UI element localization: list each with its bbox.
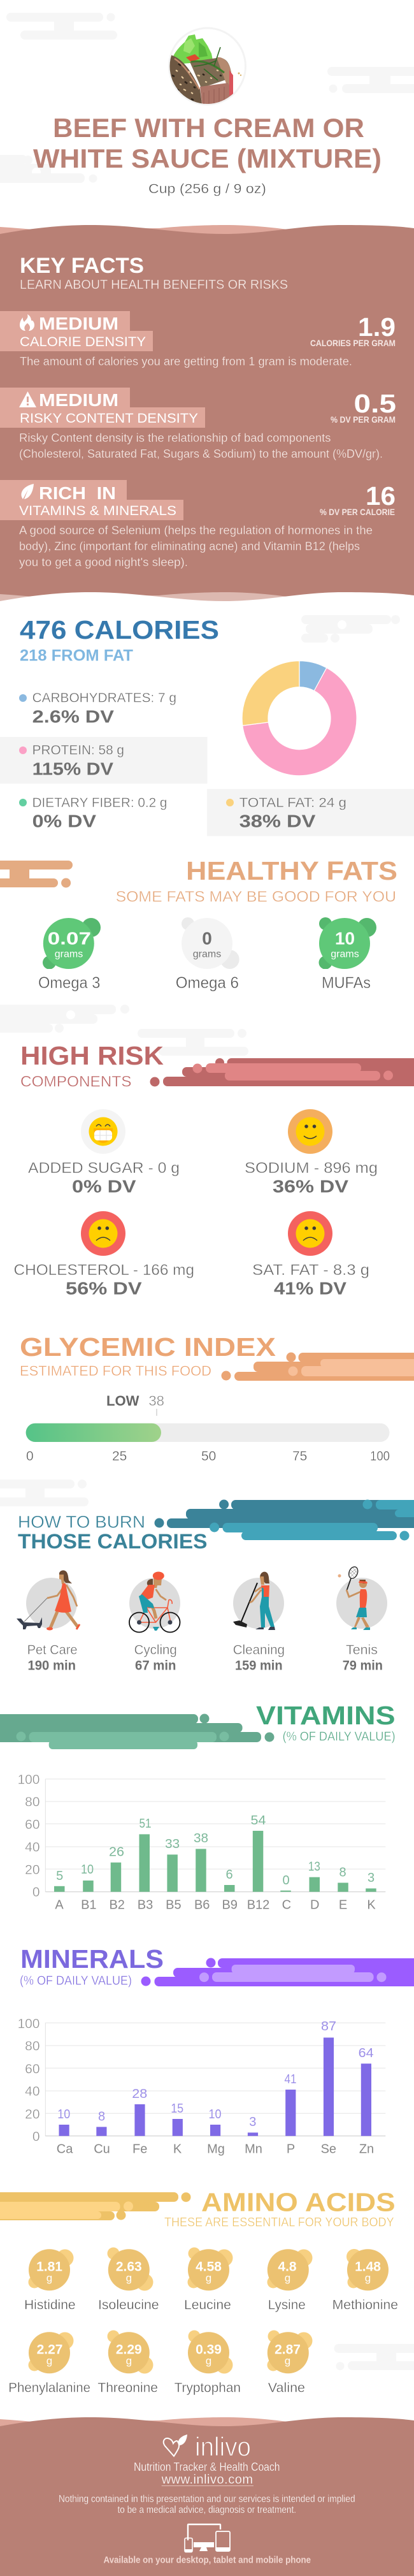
marker label: LOW <box>106 1393 139 1409</box>
scale labels: 25 <box>112 1449 127 1464</box>
activity: pet care <box>17 1570 80 1673</box>
nutrient: carbohydrates <box>19 691 176 726</box>
serving size: Cup (256 g / 9 oz) <box>148 182 266 196</box>
scale labels <box>26 1449 390 1464</box>
heading: minerals: MINERALS <box>20 1944 164 1974</box>
rating: MEDIUM <box>39 314 118 333</box>
y axis labels <box>17 1772 39 1900</box>
panel: footer <box>0 2417 414 2576</box>
x axis labels: B2 <box>109 1898 125 1912</box>
bar values: 6 <box>225 1868 233 1882</box>
glycemic scale <box>26 1393 390 1464</box>
icon: leaf <box>21 484 34 499</box>
x axis labels: K <box>173 2142 182 2156</box>
disclaimer: to be a medical advice, diagnosis or treatment. <box>117 2505 296 2515</box>
bar values: 10 <box>209 2107 222 2121</box>
amino acid: tryptophan: g <box>206 2355 211 2367</box>
bar values: 5 <box>56 1869 63 1883</box>
subheading: calories from fat: 218 FROM FAT <box>20 646 133 664</box>
bar values: 28 <box>132 2087 147 2101</box>
nutrient: protein: 115% DV <box>32 759 113 778</box>
risk: sodium <box>245 1109 378 1197</box>
x axis labels: Mg <box>207 2142 225 2156</box>
x axis labels: Fe <box>132 2142 147 2156</box>
amino acid: phenylalanine: Phenylalanine <box>8 2381 90 2396</box>
heading: amino acids: AMINO ACIDS <box>201 2187 396 2216</box>
activity: cleaning: 159 min <box>235 1658 283 1673</box>
subheading: key facts: LEARN ABOUT HEALTH BENEFITS OR RISKS <box>20 277 288 292</box>
bars <box>54 1831 376 1892</box>
title: BEEF WITH CREAM OR <box>53 113 364 143</box>
subheading: components: COMPONENTS <box>20 1073 131 1090</box>
amino acid: leucine: Leucine <box>184 2298 231 2313</box>
bar values: 64 <box>359 2046 374 2060</box>
x axis labels: B5 <box>166 1898 182 1912</box>
activity: cleaning: Cleaning <box>233 1643 285 1657</box>
bar values: 10 <box>57 2107 70 2121</box>
y axis labels: 60 <box>25 1817 39 1832</box>
title: WHITE SAUCE (MIXTURE) <box>33 143 382 173</box>
y axis labels: 80 <box>25 1795 39 1809</box>
activity: tennis: 79 min <box>343 1658 383 1673</box>
bar values: 8 <box>98 2110 105 2124</box>
heading: calories: 476 CALORIES <box>20 615 219 644</box>
risk: saturated fat <box>252 1211 369 1299</box>
decorative band: burn <box>154 1499 414 1540</box>
scale labels: 75 <box>292 1449 307 1464</box>
risk: added sugar: ADDED SUGAR - 0 g <box>28 1160 180 1177</box>
amino acid: histidine: 1.81 <box>36 2260 62 2274</box>
icon: grinning face <box>81 1109 125 1154</box>
description: you to get a good night's sleep). <box>19 556 188 569</box>
icon: warning triangle <box>19 391 36 407</box>
amino acid: threonine: 2.29 <box>116 2342 142 2357</box>
amino acid: lysine: 4.8 <box>278 2260 297 2274</box>
icon: woman walking dog <box>17 1570 80 1631</box>
decorative band: high risk <box>150 1058 414 1086</box>
y axis labels: 60 <box>25 2062 39 2076</box>
risk: cholesterol <box>14 1211 194 1299</box>
nutrient: total fat: TOTAL FAT: 24 g <box>239 796 346 810</box>
icon: sad face <box>81 1211 125 1256</box>
bars <box>59 2037 371 2136</box>
amino acid: phenylalanine <box>8 2332 90 2396</box>
badge: MUFAs: MUFAs <box>322 974 371 992</box>
bar values: 3 <box>368 1871 375 1885</box>
risk: added sugar <box>28 1109 180 1197</box>
amino acid: leucine <box>184 2248 233 2313</box>
x axis labels: Zn <box>359 2142 374 2156</box>
fact: rich in vitamins and minerals <box>0 480 396 569</box>
disclaimer: Nothing contained in this presentation and our services is intended or implied <box>59 2494 355 2505</box>
bar values: 10 <box>81 1863 94 1877</box>
unit: % DV PER GRAM <box>331 414 396 425</box>
x axis labels <box>57 2142 374 2156</box>
decorative band: glycemic index <box>222 1353 414 1381</box>
value: 0.5 <box>354 389 396 418</box>
unit: % DV PER CALORIE <box>320 507 395 517</box>
amino acid: histidine: Histidine <box>24 2298 76 2313</box>
badge: omega 3: Omega 3 <box>38 974 101 992</box>
amino acid: isoleucine: Isoleucine <box>98 2298 159 2313</box>
metric name: CALORIE DENSITY <box>20 335 146 349</box>
heading: high risk: HIGH RISK <box>20 1041 164 1070</box>
decorative band: vitamins <box>0 1714 274 1749</box>
bar values: 0 <box>282 1874 290 1888</box>
badge: omega 6: Omega 6 <box>176 974 239 992</box>
amino acid: valine: Valine <box>268 2381 305 2396</box>
heading: how to burn those calories <box>18 1513 208 1553</box>
y axis labels: 20 <box>25 1863 39 1877</box>
heading: how to burn those calories: HOW TO BURN <box>18 1513 145 1532</box>
decorative band: healthy fats <box>0 861 73 887</box>
icon: sad face <box>288 1211 332 1256</box>
bar values: 87 <box>321 2019 336 2034</box>
donut chart: macronutrients <box>242 661 357 776</box>
bar values: 26 <box>109 1845 124 1859</box>
amino acid: lysine: Lysine <box>268 2298 306 2313</box>
x axis labels: B3 <box>138 1898 153 1912</box>
y axis labels: 40 <box>25 2085 39 2099</box>
amino acid: lysine: g <box>285 2272 290 2284</box>
amino acid: methionine <box>332 2249 398 2313</box>
amino acid: threonine: g <box>126 2355 132 2367</box>
availability note: Available on your desktop, tablet and mobile phone <box>103 2555 311 2566</box>
y axis labels: 40 <box>25 1840 39 1855</box>
activity: cleaning <box>233 1572 285 1673</box>
scale labels: 50 <box>201 1449 216 1464</box>
value: 16 <box>366 481 396 511</box>
amino acid: tryptophan: 0.39 <box>196 2342 222 2357</box>
activity: cycling: Cycling <box>134 1643 177 1657</box>
title <box>33 113 382 173</box>
badge: omega 6: grams <box>193 949 221 960</box>
amino acid: tryptophan: Tryptophan <box>175 2381 241 2396</box>
description: The amount of calories you are getting from 1 gram is moderate. <box>20 355 352 368</box>
description <box>19 432 383 460</box>
activity: cycling <box>129 1572 180 1673</box>
nutrient: protein: PROTEIN: 58 g <box>32 743 124 758</box>
amino acid: lysine <box>268 2249 312 2313</box>
amino acid: phenylalanine: 2.27 <box>37 2342 62 2357</box>
activity: tennis: Tenis <box>346 1643 378 1657</box>
nutrient: dietary fiber: DIETARY FIBER: 0.2 g <box>32 796 167 810</box>
fact: calorie density <box>0 311 396 368</box>
bar values: 8 <box>339 1865 346 1879</box>
bar values <box>56 1814 375 1888</box>
badge: MUFAs: grams <box>331 949 359 960</box>
bar values: 41 <box>284 2072 297 2086</box>
risk: cholesterol: 56% DV <box>66 1279 142 1299</box>
amino acid: phenylalanine: g <box>46 2355 52 2367</box>
subheading: glycemic index: ESTIMATED FOR THIS FOOD <box>20 1363 211 1379</box>
description: A good source of Selenium (helps the regulation of hormones in the <box>19 524 373 537</box>
logo: inlivo <box>164 2432 251 2462</box>
subheading: amino acids: THESE ARE ESSENTIAL FOR YOUR BODY <box>164 2216 394 2230</box>
nutrient: protein <box>0 737 208 783</box>
x axis labels: D <box>310 1898 319 1912</box>
bar values: 38 <box>194 1831 208 1845</box>
y axis labels: 20 <box>25 2107 39 2121</box>
risk: cholesterol: CHOLESTEROL - 166 mg <box>14 1262 194 1279</box>
badge: omega 3: 0.07 <box>48 929 91 949</box>
bar values: 13 <box>308 1860 320 1874</box>
nutrient: dietary fiber: 0% DV <box>32 811 96 831</box>
x axis labels: P <box>287 2142 295 2156</box>
risk: saturated fat: SAT. FAT - 8.3 g <box>252 1262 369 1279</box>
nutrient: total fat <box>207 789 414 836</box>
bar values: 15 <box>171 2102 183 2116</box>
subheading: minerals: (% OF DAILY VALUE) <box>20 1974 132 1988</box>
heading: vitamins: VITAMINS <box>256 1701 396 1730</box>
amino acid: valine <box>268 2331 312 2396</box>
x axis labels: Mn <box>245 2142 262 2156</box>
description: body), Zinc (important for eliminating acne) and Vitamin B12 (helps <box>19 540 360 553</box>
scale labels: 0 <box>26 1449 34 1464</box>
glycemic scale: 38 <box>148 1393 164 1409</box>
icon: woman on bicycle <box>129 1572 180 1632</box>
heading: glycemic index: GLYCEMIC INDEX <box>20 1332 276 1362</box>
activity: tennis <box>336 1566 387 1673</box>
bar values: 33 <box>165 1837 180 1851</box>
risk: sodium: 36% DV <box>273 1177 348 1197</box>
fact: risky content density <box>0 388 396 460</box>
subheading: vitamins: (% OF DAILY VALUE) <box>283 1730 396 1744</box>
x axis labels: B6 <box>194 1898 210 1912</box>
value: 1.9 <box>358 312 396 342</box>
y axis labels: 100 <box>17 2017 39 2032</box>
background clouds: high risk <box>0 1005 248 1056</box>
icon: person sweeping <box>233 1572 284 1630</box>
background cloud: amino acids <box>334 2344 414 2370</box>
amino acid: histidine <box>24 2249 76 2313</box>
bar values: 51 <box>139 1817 152 1831</box>
x axis labels <box>55 1898 376 1912</box>
heading: healthy fats: HEALTHY FATS <box>186 856 397 885</box>
icon: tennis player <box>336 1566 387 1630</box>
amino acid: valine: 2.87 <box>275 2342 301 2357</box>
bar values: 3 <box>249 2115 256 2129</box>
y axis labels: 80 <box>25 2039 39 2054</box>
unit: CALORIES PER GRAM <box>310 338 396 348</box>
subheading: healthy fats: SOME FATS MAY BE GOOD FOR YOU <box>116 888 396 905</box>
x axis labels: E <box>339 1898 347 1912</box>
x axis labels: K <box>367 1898 376 1912</box>
y axis labels: 0 <box>32 2129 39 2144</box>
heading: how to burn those calories: THOSE CALORIES <box>18 1530 208 1553</box>
rating: RICH IN <box>39 483 116 503</box>
scale track <box>26 1423 390 1442</box>
y axis labels <box>17 2017 39 2144</box>
activity: cycling: 67 min <box>135 1658 176 1673</box>
heading: key facts: KEY FACTS <box>20 254 144 278</box>
risk: sodium: SODIUM - 896 mg <box>245 1160 378 1177</box>
icon: flame <box>20 314 34 331</box>
logo: inlivo: inlivo <box>195 2432 251 2462</box>
y axis labels: 0 <box>32 1885 39 1900</box>
metric name: VITAMINS & MINERALS <box>19 504 176 518</box>
x axis labels: B12 <box>247 1898 269 1912</box>
bar chart: minerals <box>17 2017 385 2156</box>
amino acid: methionine: g <box>365 2272 371 2284</box>
description: Risky Content density is the relationship of bad components <box>19 432 331 444</box>
description: (Cholesterol, Saturated Fat, Sugars & Sodium) to the amount (%DV/gr). <box>19 448 383 460</box>
background cloud: calories <box>301 615 400 643</box>
bar values: 54 <box>251 1814 266 1828</box>
icon: desktop tablet phone <box>185 2524 230 2552</box>
x axis labels: C <box>282 1898 291 1912</box>
badge: MUFAs: 10 <box>335 929 355 949</box>
amino acid: isoleucine: 2.63 <box>116 2260 142 2274</box>
x axis labels: B1 <box>81 1898 97 1912</box>
nutrient: dietary fiber <box>19 796 167 831</box>
amino acid: methionine: Methionine <box>332 2298 398 2313</box>
tagline: Nutrition Tracker & Health Coach <box>134 2460 280 2473</box>
amino acid: isoleucine <box>98 2248 159 2313</box>
amino acid: leucine: 4.58 <box>196 2260 222 2274</box>
amino acid: methionine: 1.48 <box>355 2260 381 2274</box>
amino acid: threonine <box>97 2331 158 2396</box>
scale labels: 100 <box>370 1449 390 1464</box>
badge: omega 3: grams <box>55 949 83 960</box>
amino acid: tryptophan <box>175 2331 241 2396</box>
metric name: RISKY CONTENT DENSITY <box>20 411 198 426</box>
disclaimer <box>59 2494 355 2515</box>
bar values <box>57 2019 374 2129</box>
x axis labels: Cu <box>94 2142 110 2156</box>
risk: added sugar: 0% DV <box>72 1177 136 1197</box>
badge: omega 3 <box>38 918 101 992</box>
badge: omega 6 <box>176 917 239 992</box>
description <box>19 524 373 569</box>
x axis labels: A <box>55 1898 64 1912</box>
scale fill <box>26 1423 161 1442</box>
food photo: beef steak with herbs <box>169 28 246 108</box>
x axis labels: Ca <box>57 2142 73 2156</box>
x axis labels: B9 <box>222 1898 238 1912</box>
decorative band: amino acids <box>0 2192 191 2220</box>
bar chart: vitamins <box>17 1772 385 1912</box>
risk: saturated fat: 41% DV <box>274 1279 346 1299</box>
background clouds: hero <box>0 13 414 183</box>
activity: pet care: 190 min <box>28 1658 76 1673</box>
y axis labels: 100 <box>17 1772 39 1787</box>
activity: pet care: Pet Care <box>27 1643 78 1657</box>
decorative band: minerals <box>141 1958 414 1986</box>
nutrient: total fat: 38% DV <box>239 811 316 831</box>
icon: smiling face <box>288 1109 332 1154</box>
rating: MEDIUM <box>39 390 118 410</box>
x axis labels: Se <box>321 2142 336 2156</box>
badge: MUFAs <box>318 917 376 992</box>
website: www.inlivo.com <box>161 2473 253 2487</box>
amino acid: leucine: g <box>206 2272 211 2284</box>
amino acid: threonine: Threonine <box>97 2381 158 2396</box>
amino acid: valine: g <box>285 2355 290 2367</box>
amino acid: isoleucine: g <box>126 2272 132 2284</box>
nutrient: carbohydrates: 2.6% DV <box>32 706 114 726</box>
badge: omega 6: 0 <box>202 929 212 949</box>
background cloud: burn <box>0 1480 89 1506</box>
nutrient: carbohydrates: CARBOHYDRATES: 7 g <box>32 691 176 706</box>
amino acid: histidine: g <box>46 2272 52 2284</box>
